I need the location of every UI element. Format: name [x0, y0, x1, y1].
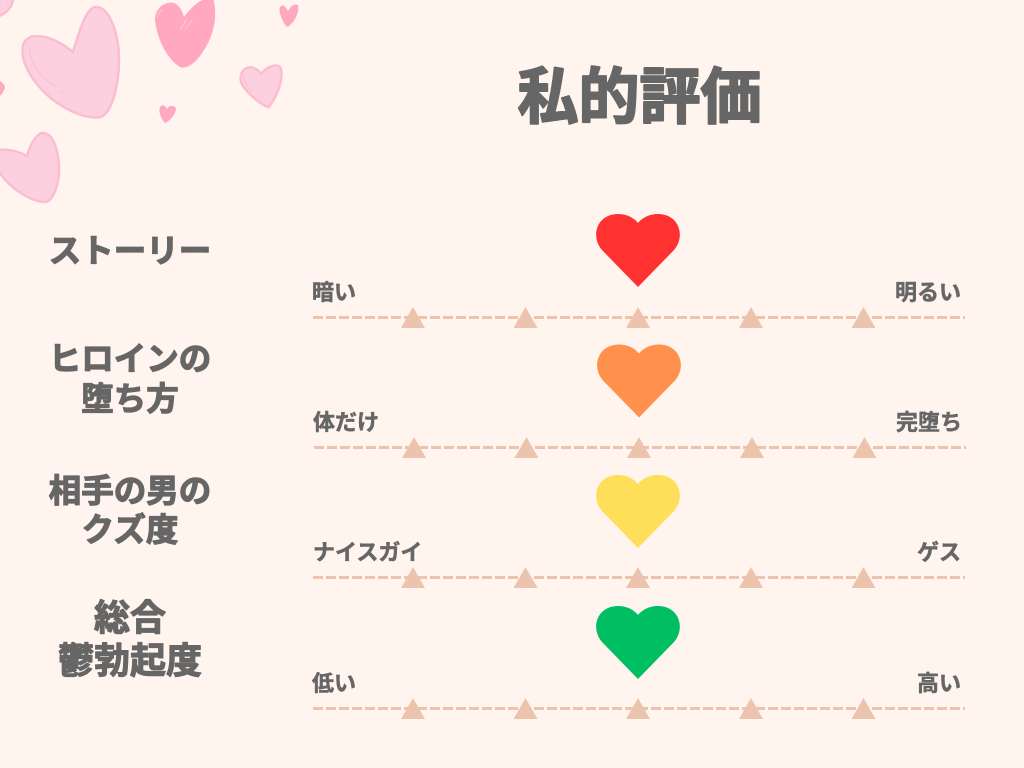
scale left label: 体だけ	[313, 410, 379, 435]
scale right label: ゲス	[917, 540, 961, 565]
label: 総合鬱勃起度: 総合	[94, 597, 166, 638]
scale right label: 明るい	[895, 280, 961, 305]
title: 私的評価	[517, 63, 762, 131]
scale left label: ナイスガイ	[313, 540, 422, 565]
scale right label: 完堕ち	[896, 410, 962, 435]
rating row: ヒロインの堕ち方	[313, 344, 966, 458]
heart: green	[596, 606, 680, 679]
rating row: ストーリー	[312, 214, 965, 328]
scale left label: 低い	[312, 671, 356, 696]
scale left label: 暗い	[312, 280, 356, 305]
label: ストーリー: ストーリー	[49, 233, 211, 269]
scale right label: 高い	[917, 671, 961, 696]
scale	[313, 567, 965, 588]
scale	[313, 698, 965, 719]
scale	[314, 437, 966, 458]
decorative hearts	[0, 0, 298, 202]
rating row: 相手の男のクズ度	[313, 475, 965, 588]
heart: yellow	[596, 475, 680, 548]
label: 相手の男のクズ度: 相手の男の	[49, 473, 211, 509]
label: ヒロインの堕ち方: ヒロインの	[49, 341, 211, 377]
label: 相手の男のクズ度: クズ度	[82, 511, 178, 548]
heart: orange	[597, 344, 681, 418]
label: 総合鬱勃起度: 鬱勃起度	[58, 640, 202, 681]
scale	[313, 307, 965, 328]
heart: red	[596, 214, 680, 287]
label: ヒロインの堕ち方: 堕ち方	[81, 381, 179, 417]
rating row: 総合鬱勃起度	[312, 606, 965, 719]
